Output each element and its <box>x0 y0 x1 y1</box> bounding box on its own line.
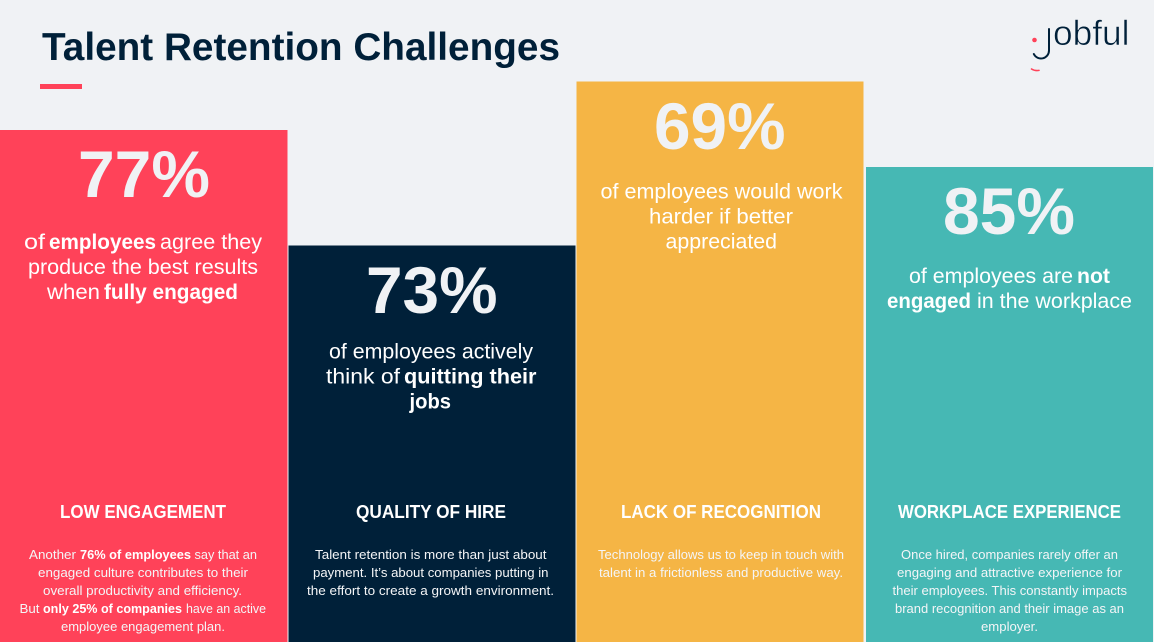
description: talent in a frictionless and productive way. <box>599 565 843 580</box>
panel: workplace experience <box>866 167 1153 642</box>
lead text: engaged <box>887 289 971 313</box>
description: Technology allows us to keep in touch with <box>598 547 844 562</box>
lead text: of employees are <box>909 264 1073 288</box>
logo: jobful: obful <box>1053 14 1130 53</box>
description: say that an <box>194 547 257 562</box>
lead text: employees <box>49 230 156 254</box>
stat: 85%: 85% <box>943 174 1075 248</box>
heading: WORKPLACE EXPERIENCE <box>898 502 1121 522</box>
description <box>892 547 1127 634</box>
description <box>307 547 554 598</box>
lead text: of employees actively <box>329 340 533 364</box>
description <box>20 547 266 634</box>
stat: 77%: 77% <box>78 137 210 211</box>
lead text: of <box>24 230 45 254</box>
description: engaging and attractive experience for <box>897 565 1123 580</box>
lead text <box>326 340 537 414</box>
description: 76% of employees <box>80 547 191 562</box>
description: Another <box>29 547 77 562</box>
lead text: think of <box>326 364 400 388</box>
title accent bar <box>40 84 82 89</box>
title: Talent Retention Challenges <box>42 26 560 69</box>
description: brand recognition and their image as an <box>895 601 1124 616</box>
lead text: fully engaged <box>104 280 238 304</box>
description: their employees. This constantly impacts <box>892 583 1127 598</box>
description <box>598 547 844 580</box>
lead text: of employees would work <box>600 180 843 204</box>
description: engaged culture contributes to their <box>38 565 249 580</box>
lead text: produce the best results <box>28 255 258 279</box>
description: Once hired, companies rarely offer an <box>901 547 1118 562</box>
description: only 25% of companies <box>43 601 182 616</box>
logo: jobful <box>1032 14 1130 71</box>
lead text: harder if better <box>649 204 793 228</box>
lead text: in the workplace <box>977 289 1132 313</box>
heading: QUALITY OF HIRE <box>356 502 506 522</box>
panel: low engagement <box>0 130 288 642</box>
lead text: agree they <box>160 230 262 254</box>
description: overall productivity and efficiency. <box>43 583 242 598</box>
panel: lack of recognition <box>576 82 864 642</box>
panel: quality of hire <box>288 246 576 642</box>
lead text <box>24 230 262 304</box>
description: Talent retention is more than just about <box>315 547 547 562</box>
lead text: quitting their <box>404 364 537 388</box>
description: the effort to create a growth environment. <box>307 583 554 598</box>
description: employee engagement plan. <box>61 619 225 634</box>
description: have an active <box>186 601 266 616</box>
lead text: appreciated <box>666 230 777 254</box>
description: employer. <box>981 619 1038 634</box>
lead text: jobs <box>409 390 451 414</box>
lead text <box>600 180 843 254</box>
description: But <box>20 601 40 616</box>
heading: LACK OF RECOGNITION <box>621 502 821 522</box>
stat: 73%: 73% <box>366 253 498 327</box>
description: payment. It’s about companies putting in <box>313 565 548 580</box>
heading: LOW ENGAGEMENT <box>60 502 226 522</box>
lead text: when <box>46 280 100 304</box>
stat: 69%: 69% <box>654 89 786 163</box>
lead text <box>887 264 1132 313</box>
lead text: not <box>1077 264 1110 288</box>
